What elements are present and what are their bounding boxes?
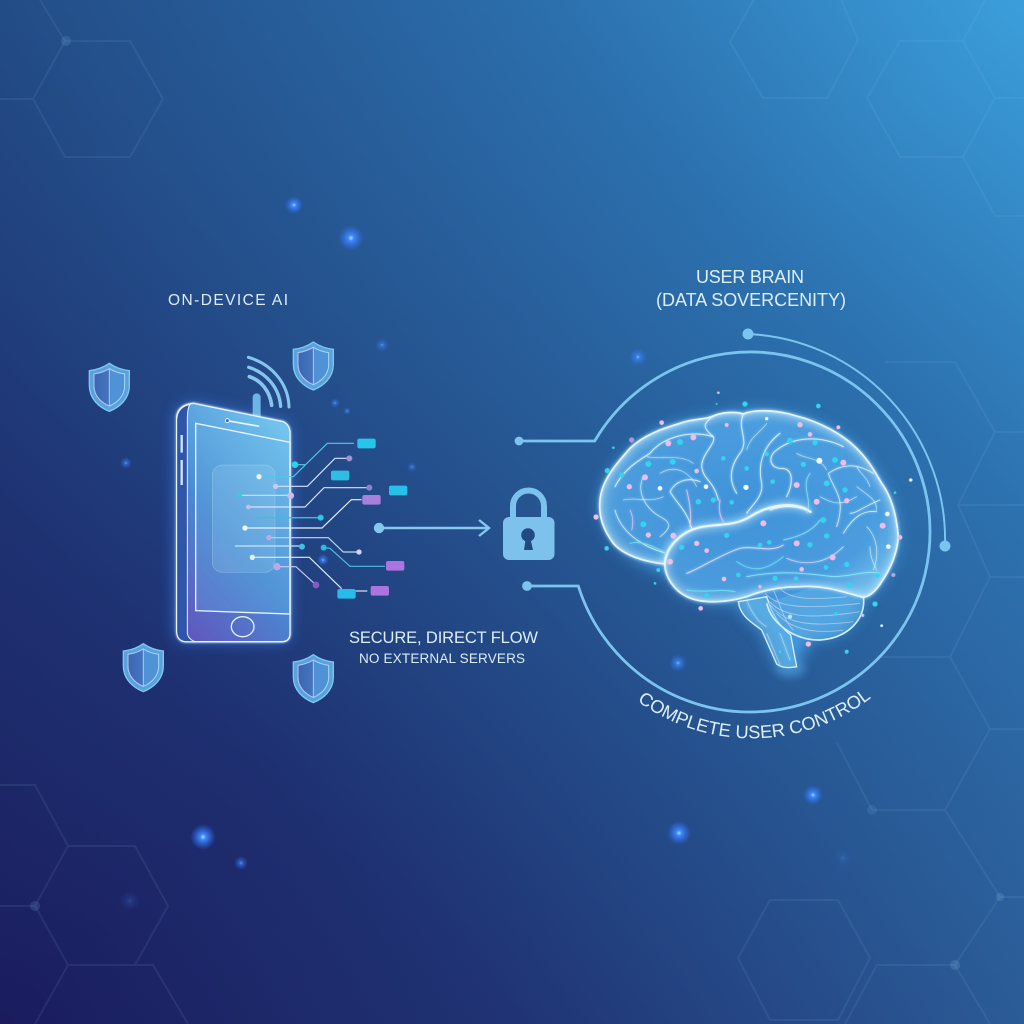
glowing particles — [120, 196, 852, 911]
brain glow — [600, 410, 898, 668]
brain illustration — [593, 391, 912, 678]
brain inner rim glow — [600, 411, 898, 602]
data trace lines — [235, 443, 385, 591]
phone body — [177, 403, 290, 642]
text: secure direct flow: SECURE, DIRECT FLOW — [349, 629, 538, 647]
text: secure direct flow — [349, 629, 538, 666]
heading: on-device AI: ON-DEVICE AI — [168, 292, 288, 309]
inner app panel — [212, 465, 275, 572]
white neuron nodes — [658, 417, 912, 627]
heading: user brain — [656, 267, 846, 310]
curved label: complete user control: COMPLETE USER CONTROL — [640, 692, 871, 738]
heading: user brain: (DATA SOVERCENITY) — [656, 290, 846, 310]
pink neuron nodes — [593, 391, 902, 647]
icon: shield top right — [293, 342, 333, 390]
icon: shield top left — [89, 363, 129, 411]
glow under brain stem — [775, 659, 805, 678]
cerebellum folds — [765, 588, 860, 631]
outer control arc — [744, 330, 950, 550]
cyan neuron nodes — [604, 401, 896, 654]
data chips — [331, 439, 407, 599]
trace end nodes — [238, 455, 372, 588]
icon: shield bottom right — [293, 655, 333, 703]
phone glow — [175, 403, 290, 642]
brain fold outlines — [615, 414, 880, 665]
arrow: secure flow to lock — [375, 520, 489, 536]
control ring — [516, 352, 930, 712]
icon: antenna and signal waves — [248, 357, 289, 417]
icon: padlock — [503, 491, 554, 560]
brain base fill — [600, 411, 898, 668]
brain outline — [600, 411, 898, 602]
text: secure direct flow: NO EXTERNAL SERVERS — [359, 651, 525, 666]
heading: user brain: USER BRAIN — [696, 267, 804, 287]
phone illustration with shields and data traces — [89, 342, 407, 703]
icon: shield bottom left — [123, 644, 163, 692]
